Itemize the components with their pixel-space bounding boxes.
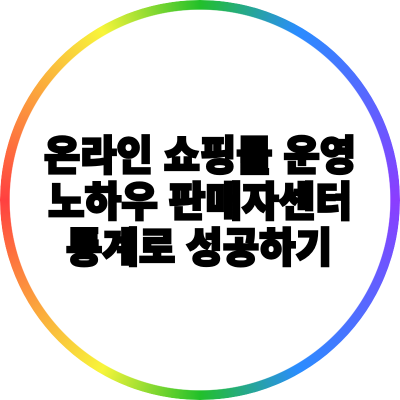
title line 1: 온라인 쇼핑몰 운영: [44, 133, 356, 179]
title line 3: 통계로 성공하기: [66, 225, 332, 271]
title line 2: 노하우 판매자센터: [48, 179, 352, 225]
